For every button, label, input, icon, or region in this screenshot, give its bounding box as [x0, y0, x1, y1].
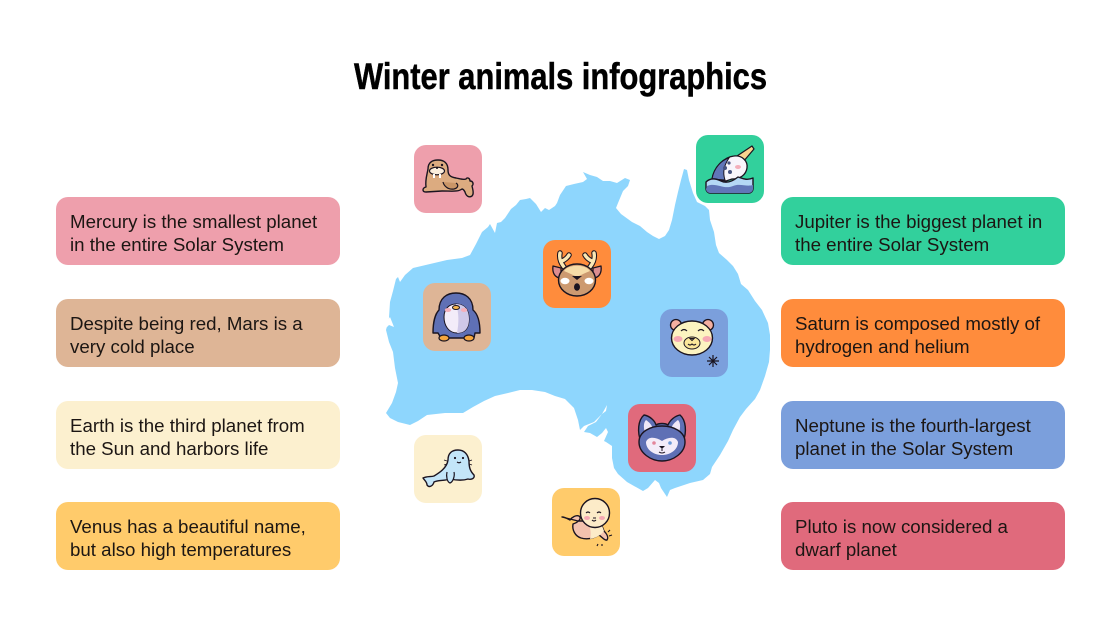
- panel: Mars: very cold place: [70, 336, 195, 357]
- panel: Pluto: [781, 502, 1065, 570]
- panel: Neptune: planet in the Solar System: [795, 438, 1013, 459]
- map: Australia: [386, 169, 770, 497]
- icon: narwhal: [696, 135, 764, 203]
- panel: Mercury: in the entire Solar System: [70, 234, 284, 255]
- panel: Jupiter: Jupiter is the biggest planet in: [795, 211, 1042, 232]
- icon: deer: [543, 240, 611, 308]
- panel: Jupiter: [781, 197, 1065, 265]
- icon: walrus: [414, 145, 482, 213]
- icon: blue seal: [414, 435, 482, 503]
- panel: Venus: Venus has a beautiful name,: [70, 516, 306, 537]
- title: Winter animals infographics: [354, 56, 767, 97]
- panel: Saturn: Saturn is composed mostly of: [795, 313, 1040, 334]
- panel: Venus: but also high temperatures: [70, 539, 291, 560]
- panel: Venus: [56, 502, 340, 570]
- panel: Earth: Earth is the third planet from: [70, 415, 305, 436]
- panel: Pluto: Pluto is now considered a: [795, 516, 1008, 537]
- panel: Jupiter: the entire Solar System: [795, 234, 989, 255]
- panel: Saturn: [781, 299, 1065, 367]
- panel: Neptune: Neptune is the fourth-largest: [795, 415, 1031, 436]
- map: Shark Bay inlet: [385, 317, 394, 328]
- panel: Pluto: dwarf planet: [795, 539, 897, 560]
- panel: Mercury: [56, 197, 340, 265]
- panel: Neptune: [781, 401, 1065, 469]
- icon: husky: [628, 404, 696, 472]
- panel: Mercury: Mercury is the smallest planet: [70, 211, 317, 232]
- panel: Saturn: hydrogen and helium: [795, 336, 970, 357]
- panel: Mars: [56, 299, 340, 367]
- panel: Earth: the Sun and harbors life: [70, 438, 268, 459]
- panel: Earth: [56, 401, 340, 469]
- icon: polar bear: [660, 309, 728, 377]
- icon: cream seal: [552, 488, 620, 556]
- panel: Mars: Despite being red, Mars is a: [70, 313, 303, 334]
- icon: penguin: [423, 283, 491, 351]
